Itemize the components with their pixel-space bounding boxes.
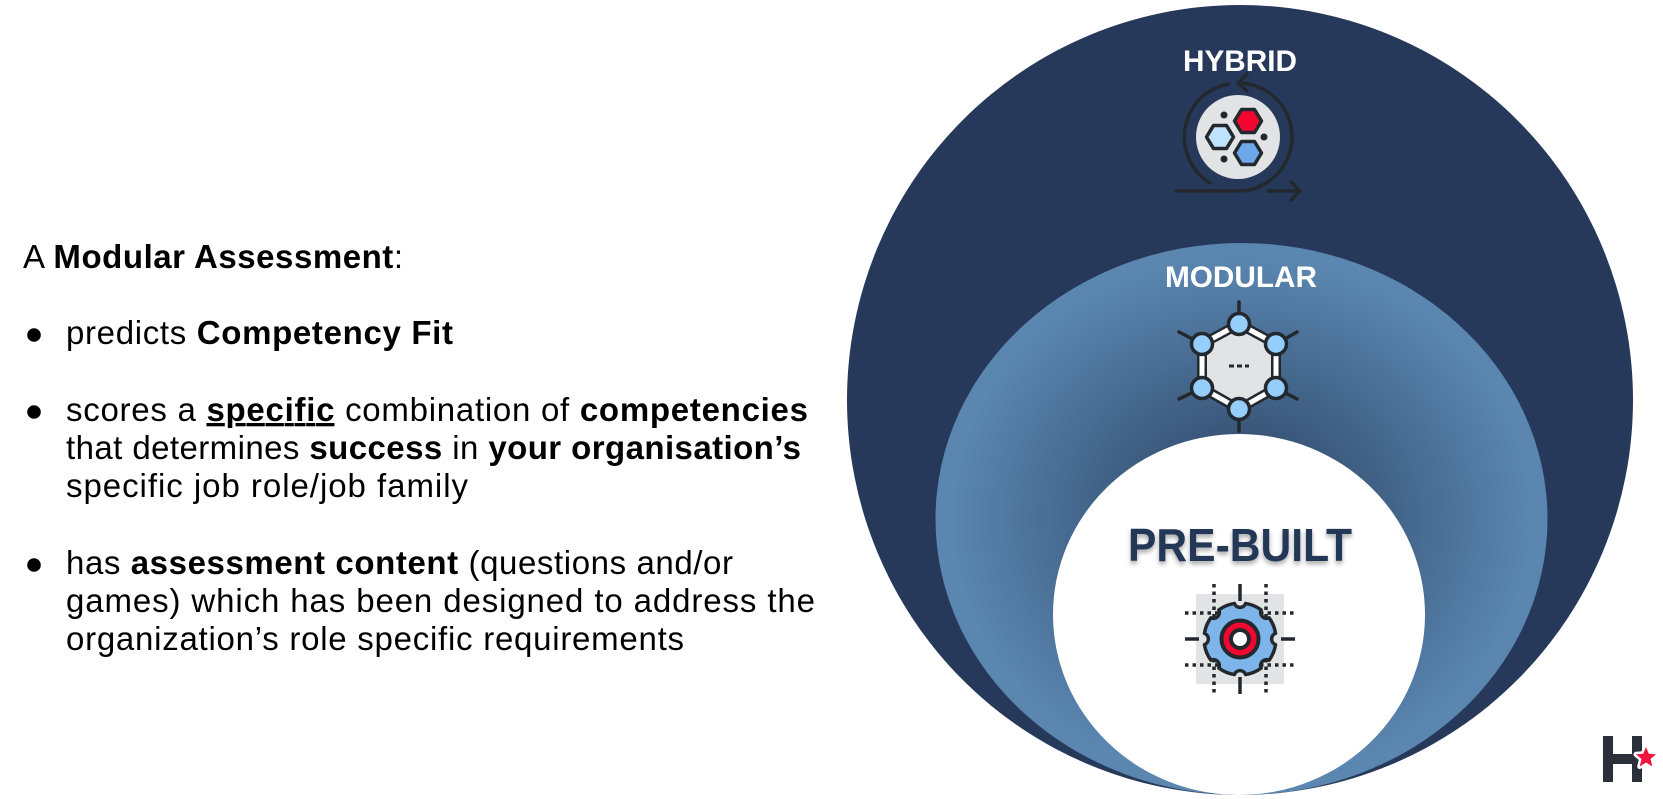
icon: modular hexagon network: [1179, 302, 1297, 431]
bullet 3: games) which has been designed to address the: [66, 582, 815, 619]
bullet 2: scores a specific combination of competencies: [66, 391, 808, 428]
heading line: A Modular Assessment:: [23, 238, 403, 275]
bullet 2: [27, 391, 808, 504]
label: hybrid: HYBRID: [1183, 45, 1297, 78]
logo: H with star: [1603, 736, 1656, 782]
icon: pre-built gear: [1185, 584, 1295, 694]
bullet 3: organization’s role specific requirements: [66, 620, 684, 657]
bullet 2: that determines success in your organisation’s: [66, 429, 801, 466]
icon: hybrid cycle with hexagons: [1176, 74, 1300, 200]
bullet 3: [27, 544, 815, 657]
label: pre-built: PRE-BUILT: [1128, 519, 1352, 571]
bullet 1: predicts Competency Fit: [66, 314, 453, 351]
text block: modular assessment description: [23, 238, 815, 657]
bullet 2: specific job role/job family: [66, 467, 468, 504]
circle: modular: [936, 243, 1548, 795]
circle: pre-built: [1053, 434, 1425, 795]
nested circle diagram: [847, 5, 1633, 795]
circle: hybrid: [847, 5, 1633, 795]
bullet 3: has assessment content (questions and/or: [66, 544, 733, 581]
label: modular: MODULAR: [1165, 261, 1317, 294]
